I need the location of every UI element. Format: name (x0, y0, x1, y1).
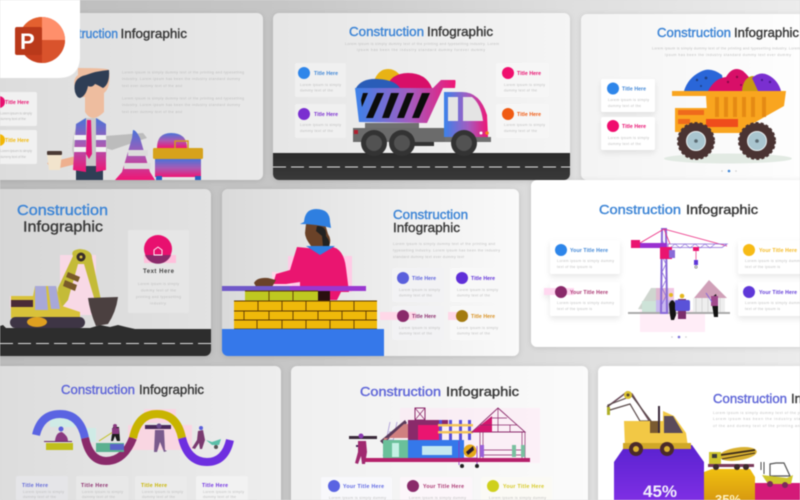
illustration: house and site (349, 408, 540, 468)
text card: dummy text of the (141, 288, 176, 292)
info card: orange: dummy text of the (504, 129, 537, 133)
illustration: beam carrier (145, 424, 171, 452)
info card: amber: Lorem ipsum is simply (457, 326, 498, 330)
heading: Construction (17, 202, 108, 219)
info card: blue: dummy text of the (300, 88, 333, 92)
info card: amber: Title Here (471, 314, 495, 320)
info card: plum: dummy text of the (399, 332, 432, 336)
card: title three: Title Here (141, 483, 167, 489)
info card: pink: Title Here (517, 71, 541, 77)
info card: indigo (392, 268, 444, 302)
illustration: wheelbarrow figure (192, 426, 221, 449)
info card: blue: Lorem ipsum is simply (608, 98, 649, 102)
info card: indigo: Lorem ipsum is simply (399, 288, 440, 292)
info card: yellow: Lorem ipsum is simply (0, 149, 32, 153)
card: title one: dummy text of the (23, 495, 56, 499)
card: title one: Lorem ipsum is simply (23, 490, 64, 494)
text card: industry. (150, 302, 167, 306)
heading: Construction (599, 202, 681, 217)
info card: yellow-green: Lorem ipsum is simply dummy (489, 496, 546, 500)
block: 45% (614, 445, 704, 500)
block: magenta (755, 483, 800, 500)
info card: indigo: Lorem ipsum is simply dummy (329, 496, 386, 500)
card: title two (76, 476, 128, 500)
heading: Infographic (23, 218, 104, 236)
text card: Text Here (143, 269, 175, 275)
info card: purple: Lorem ipsum is simply (300, 123, 341, 127)
info card: plum (544, 282, 620, 316)
info card: orange: Title Here (517, 112, 541, 118)
subtitle (652, 46, 800, 57)
subtitle (345, 42, 499, 52)
info card: amber (448, 306, 503, 340)
info card: plum: Your Title Here (423, 484, 464, 490)
card: title one (16, 476, 68, 500)
info card: orange: Lorem ipsum is simply (504, 123, 545, 127)
info card: blue: dummy text of the (608, 104, 641, 108)
illustration: tool bag (153, 133, 203, 180)
info card: purple (738, 282, 800, 316)
info card: pink: dummy text of the (0, 117, 26, 121)
info card: pink: Title Here (5, 100, 29, 106)
panel: winding process slide (0, 366, 281, 500)
heading: Construction (657, 25, 731, 40)
info card: plum: Title Here (412, 314, 436, 320)
info card: plum: Lorem ipsum is simply dummy (557, 301, 614, 305)
info card: indigo: dummy text of the (399, 294, 432, 298)
info card: yellow-green (481, 477, 552, 500)
info card: blue: Your Title Here (570, 248, 608, 254)
info card: purple: Title Here (471, 276, 495, 282)
illustration: foreman (47, 68, 147, 180)
body text: text ever dummy text of the and (122, 84, 182, 88)
illustration: bricklayer figure (44, 426, 73, 450)
plank (222, 286, 366, 291)
heading: Infographic (120, 26, 188, 41)
body text (713, 411, 800, 428)
body text: Lorem ipsum is simply dummy text of the printing and typesetting (122, 70, 244, 74)
text card: printing and typesetting (136, 295, 181, 299)
info card: blue (550, 240, 620, 274)
pagination dots (721, 170, 737, 172)
body text: text ever dummy text of the and (122, 110, 182, 114)
chart: winding ribbon (36, 409, 230, 462)
text card (128, 230, 189, 313)
subtitle: Lorem ipsum is simply dummy text of the printing and typesetting industry. Lorem (652, 46, 800, 50)
card: title four: Title Here (202, 483, 228, 489)
info card: blue: text of the ipsum is (557, 265, 592, 269)
text card: Lorem ipsum is simply (138, 282, 179, 286)
info card: yellow (738, 240, 800, 274)
info card: pink: Title Here (622, 124, 646, 130)
card: title two: Title Here (81, 483, 108, 489)
illustration: traffic cone (115, 130, 155, 180)
info card: pink (0, 92, 37, 126)
info card: yellow: dummy text of the (0, 155, 26, 159)
illustration: tower crane and site (628, 229, 730, 332)
info card: pink (496, 63, 549, 97)
info card: yellow (0, 130, 37, 164)
heading: Construction (360, 384, 441, 399)
info card: purple: text of the ipsum is (745, 307, 780, 311)
info card: purple (295, 104, 346, 138)
panel: mining truck slide (581, 14, 800, 180)
body text: industry. Lorem ipsum has been the industry standard dummy (122, 103, 240, 107)
info card: plum (380, 306, 444, 340)
info card: blue: Lorem ipsum is simply dummy (557, 259, 614, 263)
info card: plum (400, 477, 472, 500)
info card: blue: Title Here (622, 86, 646, 92)
body text: standard dummy text ever dummy text (393, 255, 464, 259)
illustration: brick wall (234, 291, 377, 329)
info card: plum: text of the ipsum is (557, 307, 592, 311)
info card: yellow-green: Your Title Here (503, 484, 544, 490)
icon: house (144, 235, 176, 264)
subtitle: Lorem ipsum is simply dummy text of the printing and typesetting industry. Lorem (345, 42, 499, 46)
info card: blue: Lorem ipsum is simply (300, 83, 341, 87)
card: title two: Lorem ipsum is simply (82, 490, 123, 494)
powerpoint badge (0, 0, 80, 78)
subtitle: ipsum has been the industry standard dummy text ever dummy (665, 53, 791, 57)
panel: excavator slide (0, 189, 211, 356)
info card: pink: Lorem ipsum is simply (608, 136, 649, 140)
illustration: cement mixer (708, 445, 758, 470)
subtitle: ipsum has been the industry standard dummy forever dummy (357, 48, 485, 52)
illustration: bricklayer (254, 209, 352, 302)
body text: typesetting industry. Lorem ipsum has been the industry (393, 248, 500, 252)
icon: powerpoint logo: P (20, 29, 35, 54)
info card: plum: Lorem ipsum is simply (399, 326, 440, 330)
road (0, 329, 211, 356)
info card: purple (450, 268, 503, 302)
info card: pink: Lorem ipsum is simply (504, 83, 545, 87)
illustration: forklift (761, 462, 793, 488)
heading: Construction (713, 391, 787, 406)
illustration: excavator (0, 249, 135, 331)
info card: pink (601, 117, 655, 150)
card: title two: dummy text of the (82, 495, 115, 499)
heading: Construction (349, 24, 424, 39)
block: 35% (704, 469, 755, 500)
info card: plum: Lorem ipsum is simply dummy (409, 496, 466, 500)
illustration: dump truck (353, 69, 491, 156)
panel: tower crane slide (531, 180, 800, 347)
heading: Infographic (686, 202, 759, 217)
info card: amber: dummy text of the (457, 332, 490, 336)
info card: plum: Your Title Here (570, 290, 608, 296)
body text: Lorem ipsum is simply dummy text of the printing and typesetting (122, 96, 244, 100)
card: title four: Lorem ipsum is simply (203, 490, 244, 494)
info card: indigo (321, 477, 392, 500)
info card: yellow: Title Here (5, 138, 29, 144)
heading: Infographic (446, 384, 520, 399)
illustration: paving figure (96, 424, 124, 452)
card: title four: dummy text of the (203, 495, 236, 499)
info card: indigo: Your Title Here (343, 484, 384, 490)
panel: percent blocks slide (598, 366, 800, 500)
info card: pink: dummy text of the (504, 88, 537, 92)
heading: Construction (61, 382, 135, 397)
info card: purple: Title Here (314, 112, 338, 118)
heading: Construction (393, 207, 468, 222)
body text: Lorem ipsum is simply dummy text of the printing and (393, 242, 495, 246)
info card: purple: dummy text of the (457, 294, 490, 298)
panel: dump truck slide (273, 13, 570, 180)
body text (393, 242, 500, 259)
base block (222, 329, 384, 356)
heading: Infographic (427, 24, 494, 39)
info card: purple: dummy text of the (300, 129, 333, 133)
info card: purple: Your Title Here (759, 290, 797, 296)
body text (122, 70, 244, 114)
info card: pink: Lorem ipsum is simply (0, 112, 32, 116)
road (273, 153, 570, 180)
info card: blue (295, 63, 346, 97)
heading: Infographic (734, 25, 799, 40)
card: title four (196, 476, 248, 500)
pagination dots (671, 336, 687, 338)
info card: orange (496, 104, 549, 138)
card: title one: Title Here (22, 483, 48, 489)
info card: blue: Title Here (314, 71, 338, 77)
card: title three: dummy text of the (142, 495, 175, 499)
illustration: yellow crane truck (607, 391, 691, 456)
card: title three (135, 476, 187, 500)
panel: bricklayer slide (222, 189, 519, 356)
illustration: mining dump truck (664, 69, 792, 164)
heading: Infographic (139, 382, 204, 397)
info card: indigo: Title Here (412, 276, 436, 282)
info card: blue (601, 79, 655, 112)
info card: yellow: Your Title Here (759, 248, 797, 254)
body text: industry. Lorem ipsum has been the industry standard dummy (122, 77, 240, 81)
panel: house building slide (291, 366, 588, 500)
info card: pink: dummy text of the (608, 142, 641, 146)
heading: Construction (50, 26, 118, 41)
card: title three: Lorem ipsum is simply (142, 490, 183, 494)
info card: yellow: text of the ipsum is (745, 265, 780, 269)
info card: purple: Lorem ipsum is simply (457, 288, 498, 292)
heading: Infographic (393, 220, 461, 235)
panel: worker slide (0, 13, 263, 180)
